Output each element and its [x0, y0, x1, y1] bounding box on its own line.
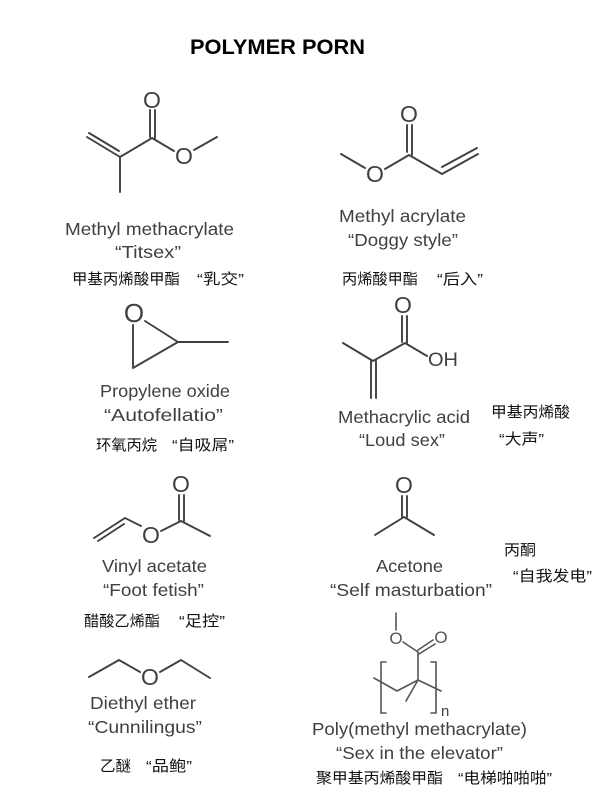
Chinese name: 醋酸乙烯酯 [84, 613, 160, 630]
name: methyl acrylate: Methyl acrylate [339, 206, 466, 226]
Chinese label: 丙酮 [504, 542, 536, 559]
panel: diethyl ether [88, 660, 210, 775]
nickname: Sex in the elevator: “Sex in the elevator” [336, 743, 503, 763]
atom: carbonyl oxygen: O [172, 471, 190, 497]
atom: ester oxygen: O [175, 143, 193, 169]
Chinese name: 乙醚 [100, 758, 131, 775]
label: OH group: OH [428, 350, 458, 371]
name: methyl methacrylate: Methyl methacrylate [65, 219, 234, 239]
panel: vinyl acetate [84, 471, 225, 630]
Chinese name: 丙烯酸甲酯 [342, 271, 418, 288]
atom: carbonyl oxygen: O [143, 87, 161, 113]
name: vinyl acetate: Vinyl acetate [102, 556, 207, 576]
structure: methyl methacrylate [87, 110, 217, 192]
atom: carbonyl oxygen: O [394, 292, 412, 318]
panel: acetone [330, 472, 592, 600]
atom: ester oxygen: O [142, 522, 160, 548]
name: diethyl ether: Diethyl ether [90, 693, 196, 713]
Chinese nickname: “自吸屌” [172, 437, 234, 454]
Chinese nickname: “乳交” [197, 270, 244, 288]
Chinese nickname: “大声” [499, 430, 544, 448]
atom: epoxide oxygen: O [124, 298, 144, 328]
Chinese label: 甲基丙烯酸 [491, 404, 570, 421]
structure: methyl acrylate [341, 125, 478, 174]
atom: ester oxygen: O [366, 161, 384, 187]
structure: diethyl ether [89, 660, 210, 678]
panel: methyl acrylate [339, 101, 483, 288]
name: acetone: Acetone [376, 556, 443, 576]
name: poly(methyl methacrylate): Poly(methyl methacrylate) [312, 719, 527, 739]
structure: acetone [375, 496, 434, 535]
structure: propylene oxide [133, 321, 228, 368]
Chinese name: 甲基丙烯酸甲酯 [72, 271, 180, 288]
atom: carbonyl oxygen: O [434, 628, 448, 647]
name: methacrylic acid: Methacrylic acid [338, 407, 470, 427]
nickname: Foot fetish: “Foot fetish” [103, 580, 204, 600]
panel: poly(methyl methacrylate) [312, 613, 552, 787]
Chinese nickname: “足控” [179, 613, 225, 630]
Chinese name: 聚甲基丙烯酸甲酯 [316, 770, 443, 787]
title: POLYMER PORN [190, 36, 365, 59]
nickname: Loud sex: “Loud sex” [359, 430, 445, 450]
atom: ether oxygen: O [141, 664, 159, 690]
nickname: Titsex: “Titsex” [115, 242, 181, 262]
Chinese nickname: “品鲍” [146, 758, 192, 775]
Chinese nickname: “后入” [437, 271, 483, 288]
panel: methacrylic acid [338, 292, 570, 450]
name: propylene oxide: Propylene oxide [100, 381, 230, 401]
atom: carbonyl oxygen: O [400, 101, 418, 127]
atom: ester oxygen: O [389, 629, 403, 648]
nickname: Self masturbation: “Self masturbation” [330, 580, 492, 600]
structure: PMMA repeat unit [374, 613, 441, 713]
structure: methacrylic acid [343, 316, 427, 398]
nickname: Doggy style: “Doggy style” [348, 230, 458, 250]
panel: methyl methacrylate [65, 87, 244, 288]
Chinese nickname: “电梯啪啪啪” [458, 769, 552, 787]
panel: propylene oxide [96, 298, 234, 454]
nickname: Autofellatio: “Autofellatio” [104, 405, 223, 425]
Chinese nickname: “自我发电” [513, 568, 592, 585]
label: subscript n: n [441, 703, 449, 720]
Chinese name: 环氧丙烷 [96, 437, 157, 454]
structure: vinyl acetate [94, 495, 210, 541]
atom: carbonyl oxygen: O [395, 472, 413, 498]
nickname: Cunnilingus: “Cunnilingus” [88, 717, 202, 737]
